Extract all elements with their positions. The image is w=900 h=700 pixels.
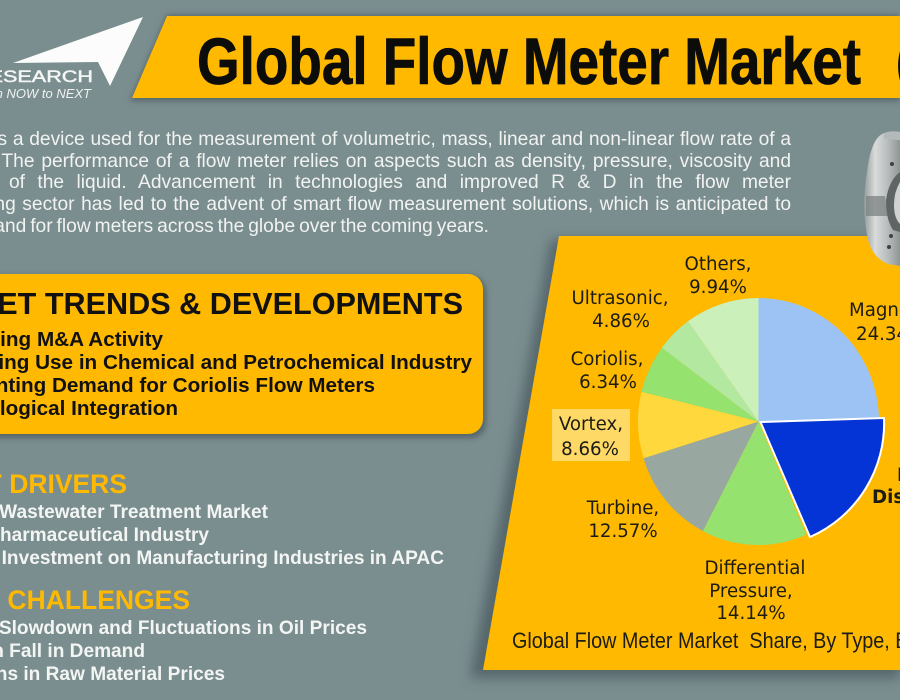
label: coriolis: Coriolis,: [571, 349, 643, 370]
label: differential pressure: [705, 558, 805, 624]
label: coriolis: [571, 349, 643, 393]
trends list: [0, 328, 472, 420]
label: vortex: Vortex,: [559, 414, 623, 435]
drivers list: [0, 502, 444, 569]
label: vortex: 8.66%: [561, 439, 619, 460]
label: positive displacement: [872, 465, 900, 531]
intro paragraph: [0, 129, 792, 237]
label: differential pressure: Pressure,: [709, 581, 793, 602]
challenges list: [0, 618, 367, 685]
title banner: [130, 15, 900, 101]
pie chart: [638, 298, 884, 545]
label: turbine: 12.57%: [588, 521, 658, 542]
label: others: 9.94%: [689, 277, 747, 298]
label: ultrasonic: Ultrasonic,: [571, 288, 669, 309]
label: ultrasonic: [571, 288, 669, 332]
label: ultrasonic: 4.86%: [592, 311, 650, 332]
logo: [0, 17, 143, 101]
label: magnetic: [849, 300, 900, 345]
label: turbine: [586, 498, 659, 542]
icon: flow meter flange: [864, 131, 900, 266]
panel: market trends and developments: [0, 274, 486, 438]
panel: market drivers: [0, 469, 444, 569]
label: others: Others,: [685, 254, 751, 275]
label: differential pressure: Differential: [705, 558, 805, 579]
panel: market challenges: [0, 585, 367, 685]
label: turbine: Turbine,: [586, 498, 659, 519]
label: differential pressure: 14.14%: [716, 603, 786, 624]
label: coriolis: 6.34%: [579, 372, 637, 393]
panel: pie chart: [470, 236, 900, 678]
label: others: [685, 254, 751, 298]
label: vortex: [552, 409, 630, 461]
icon: white arrow: [13, 17, 143, 86]
